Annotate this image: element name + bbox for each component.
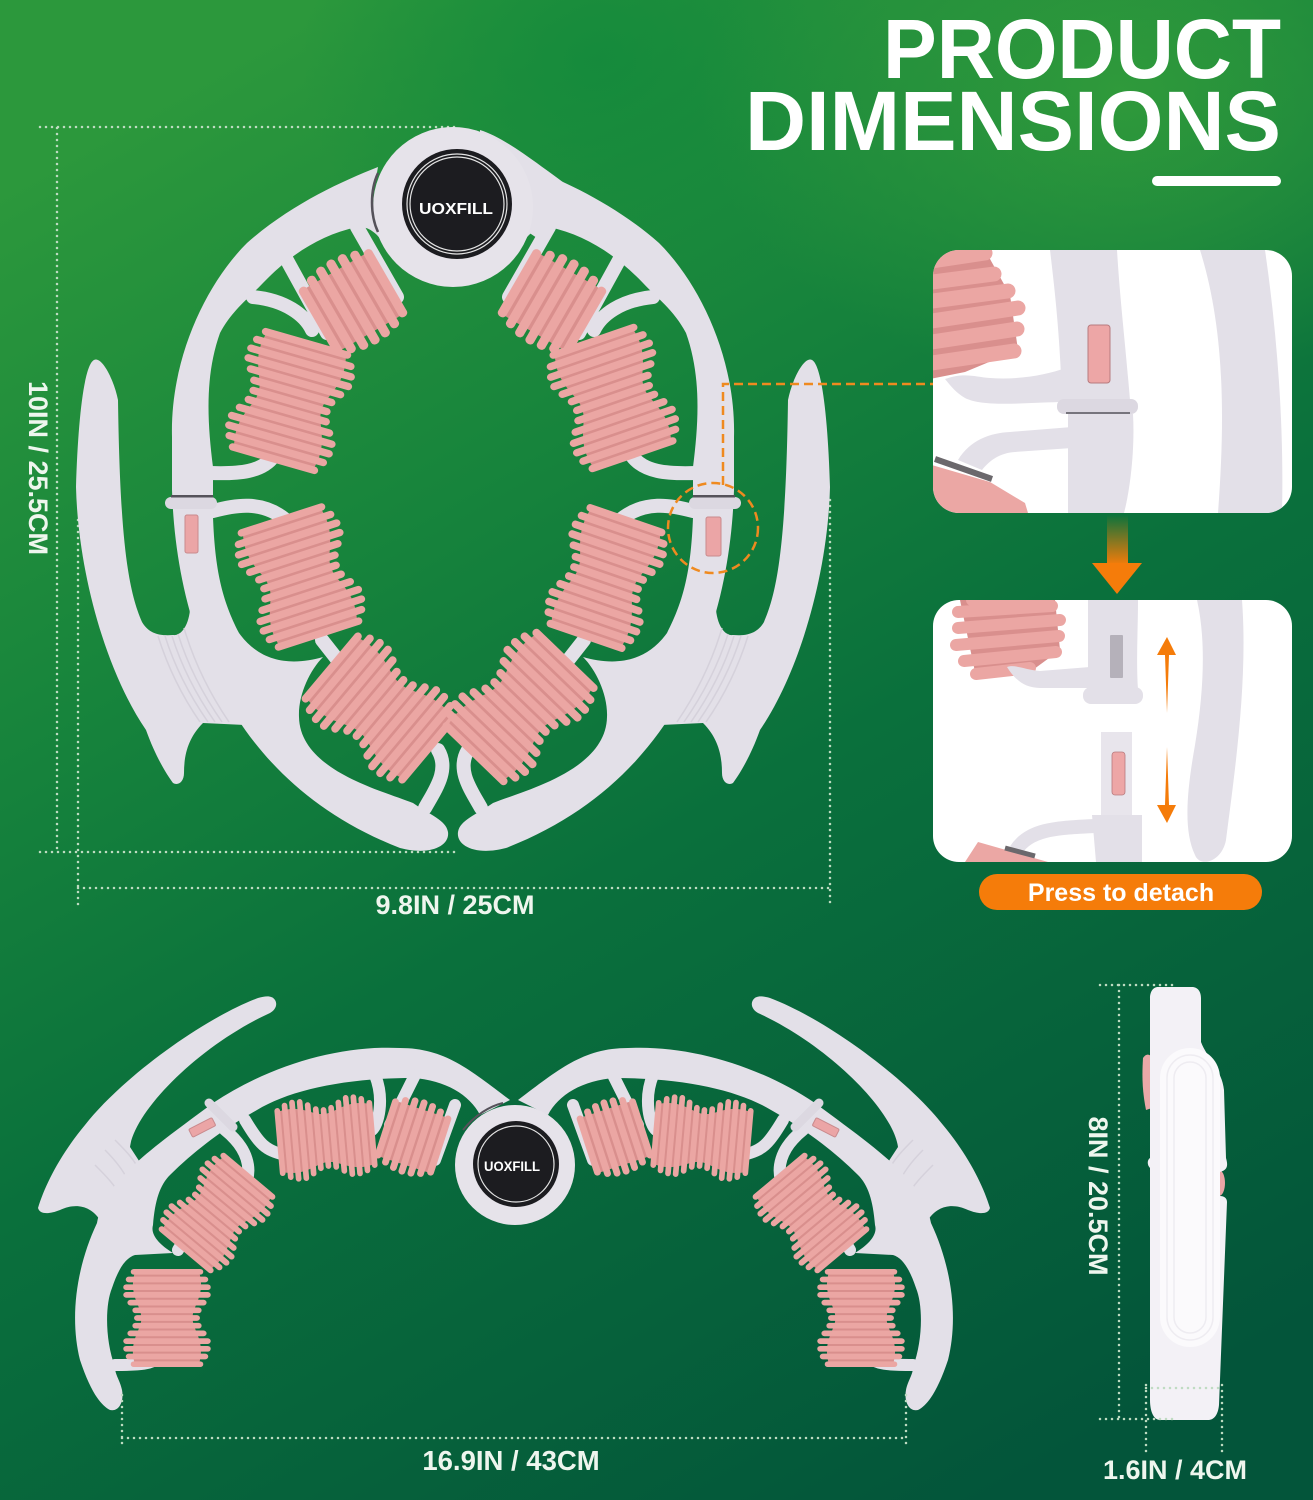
rollers: right side <box>438 243 682 789</box>
product head with logo: UOXFILL <box>419 201 493 218</box>
rollers: left side <box>223 243 462 788</box>
inset button <box>1088 325 1110 383</box>
label: height 10in: 10IN / 25.5CM <box>23 381 53 555</box>
inset roller bottom <box>933 465 1028 513</box>
orange callout: dashed circle and leader <box>668 384 935 573</box>
product: front view <box>76 127 830 851</box>
inset button lower <box>1112 752 1125 795</box>
title underline <box>1152 176 1281 186</box>
label: height 8in: 8IN / 20.5CM <box>1083 1116 1113 1276</box>
dimension lines: side view <box>1100 985 1222 1455</box>
label: width 9.8in: 9.8IN / 25CM <box>375 890 535 920</box>
dimension lines: flattened view <box>122 1395 906 1445</box>
press to detach pill: Press to detach <box>1028 879 1214 907</box>
arrow: down <box>1157 747 1176 823</box>
press to detach pill <box>979 874 1262 910</box>
inset side handle <box>1200 250 1282 513</box>
bottom product head with logo: UOXFILL <box>484 1158 540 1174</box>
inset side handle <box>1187 600 1244 862</box>
arrow: up <box>1157 637 1176 713</box>
inset slot <box>1110 635 1123 678</box>
label: length 16.9in: 16.9IN / 43CM <box>422 1445 600 1476</box>
inset ring tube <box>1050 250 1130 400</box>
inset panel: detached <box>933 598 1292 862</box>
title: DIMENSIONS <box>745 74 1281 168</box>
inset roller top <box>925 250 1018 380</box>
inset roller lower <box>965 842 1048 862</box>
title <box>745 2 1281 168</box>
title: PRODUCT <box>883 2 1281 96</box>
inset panel: attached <box>925 250 1292 513</box>
arrow: down orange <box>1092 515 1142 594</box>
release button: left <box>185 515 198 553</box>
product: side view <box>1142 987 1227 1420</box>
release button: right <box>706 517 721 556</box>
inset tab lower <box>1101 732 1132 817</box>
inset tube upper <box>1088 600 1138 690</box>
product head with logo <box>372 127 590 287</box>
inset roller upper <box>956 598 1060 674</box>
product: flattened view <box>38 996 990 1410</box>
dimension lines: front view <box>40 127 830 905</box>
bottom product head with logo <box>455 1103 575 1225</box>
label: thickness 1.6in: 1.6IN / 4CM <box>1103 1455 1247 1485</box>
